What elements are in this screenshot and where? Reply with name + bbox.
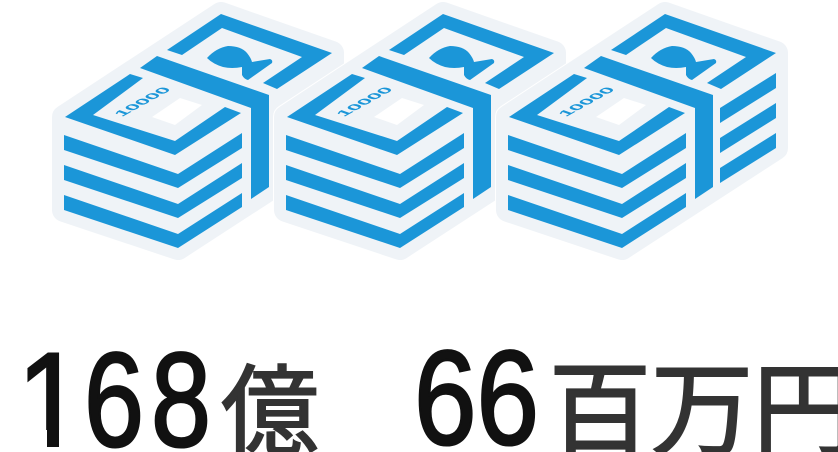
icon: money stack 2	[286, 14, 554, 248]
icon: money stack 3: 10000	[554, 85, 619, 118]
icon: money stack 2: 10000	[332, 85, 397, 118]
icon: money stack 1: 10000	[110, 85, 175, 118]
icon: money stack 1	[64, 14, 332, 248]
icon: money stack 3	[508, 14, 776, 248]
amount: 168	[27, 351, 208, 448]
